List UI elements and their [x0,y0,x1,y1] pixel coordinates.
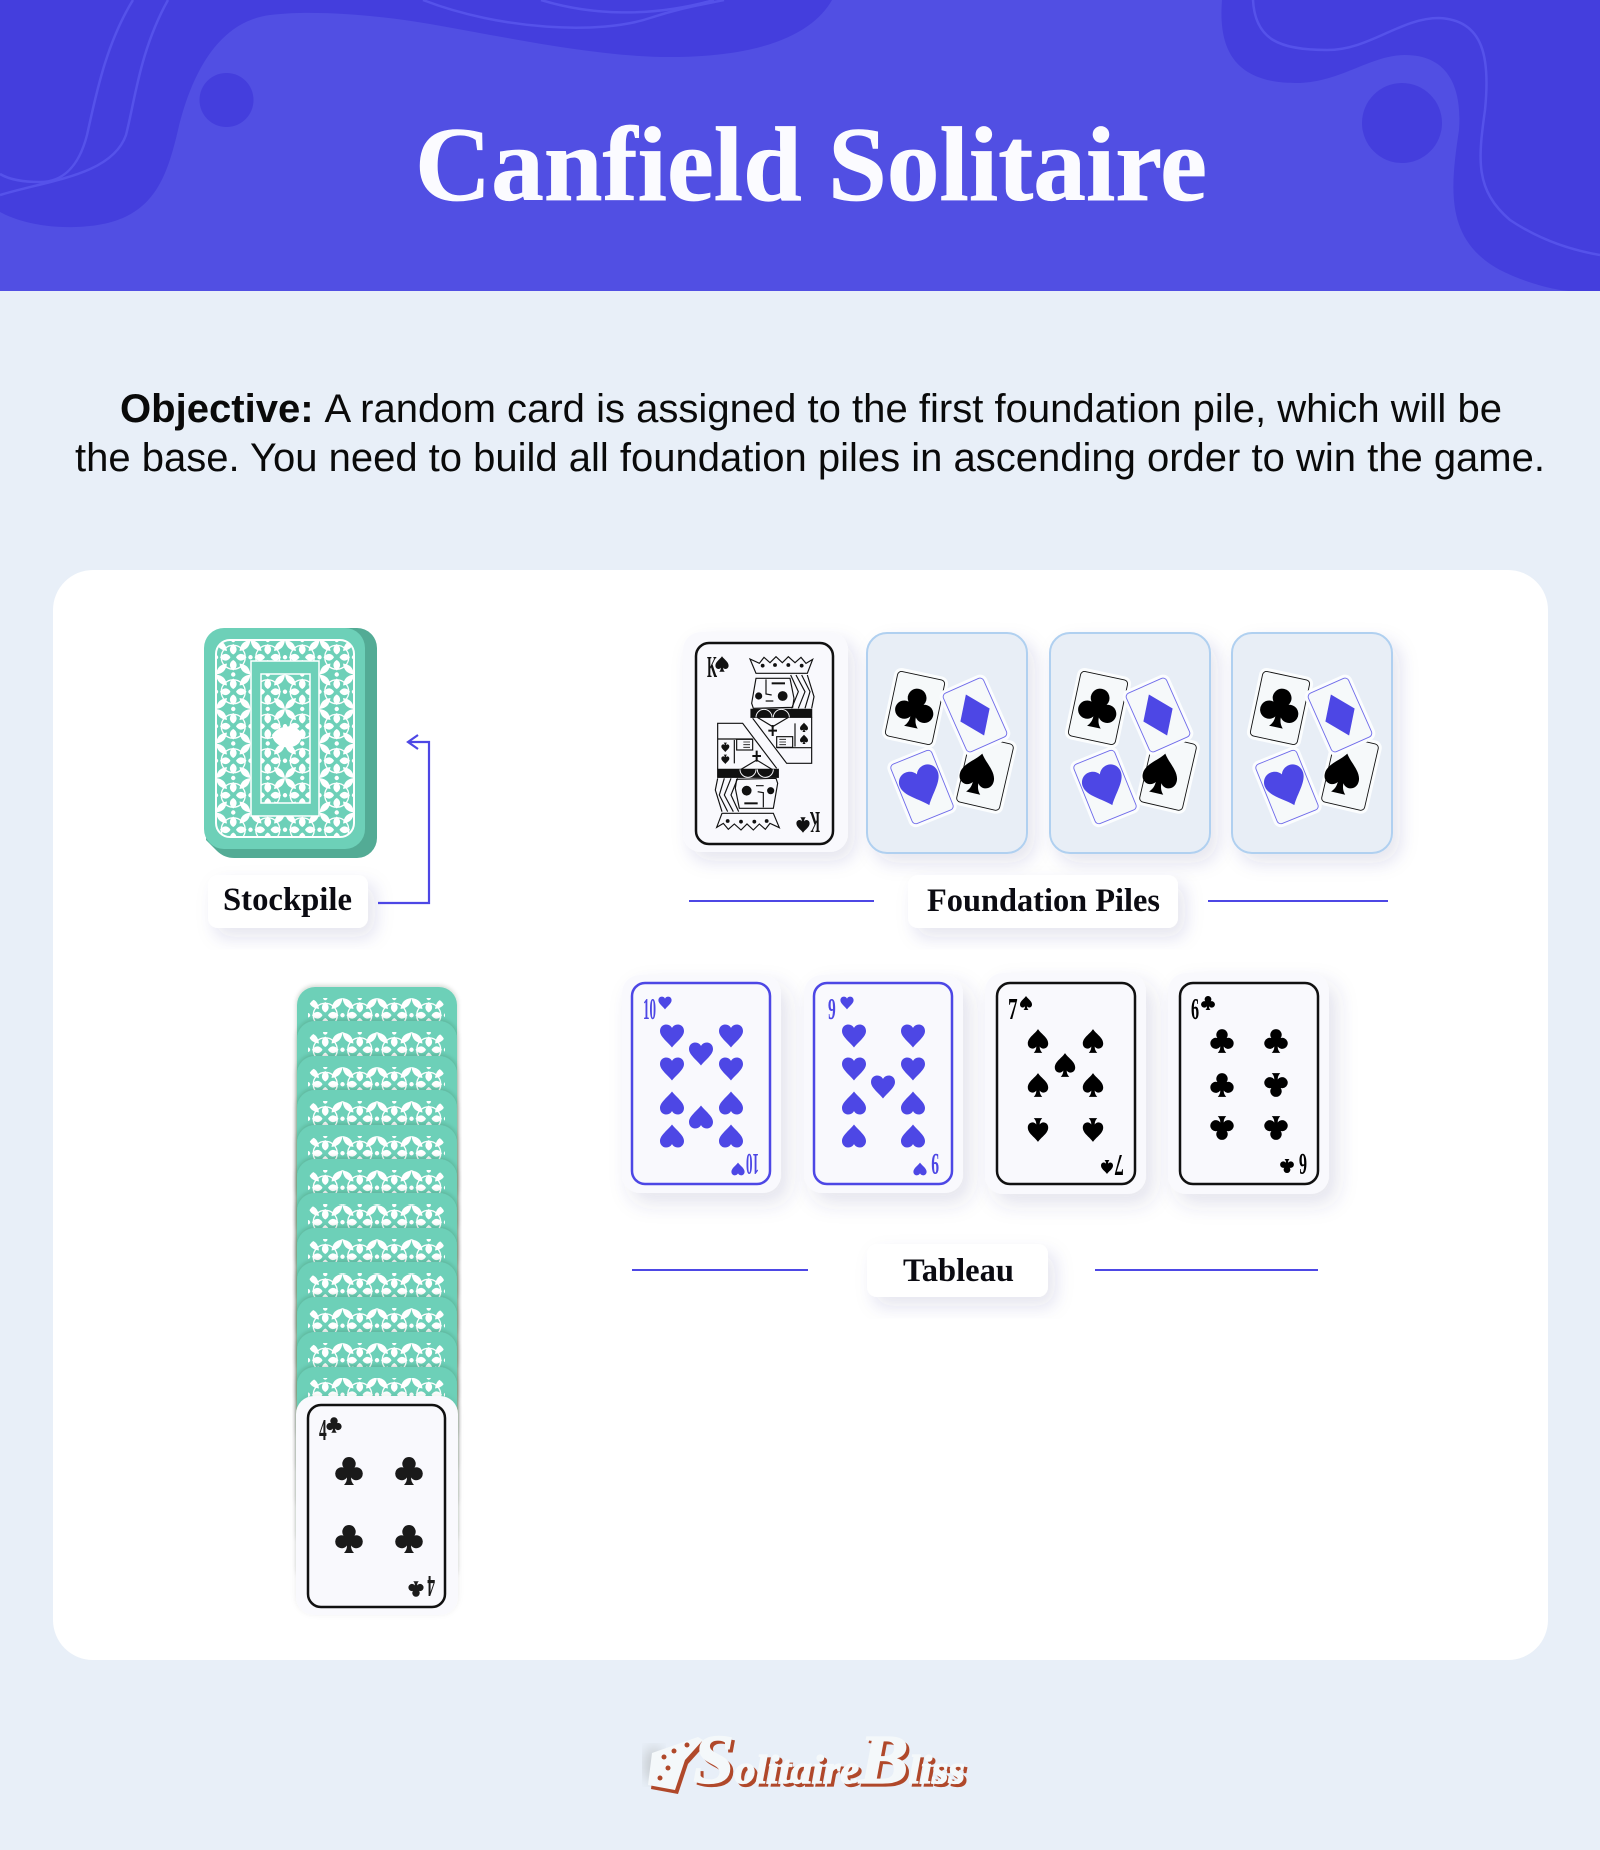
card: ten of hearts: 10 [746,1146,759,1180]
panel: empty foundation pile 1 [867,633,1027,853]
objective text: Objective: A random card is assigned to the first foundation pile, which will be [120,387,1502,431]
card: four of clubs [296,1396,458,1615]
label: Tableau [867,1244,1048,1297]
card: seven of spades: 7 [1008,991,1018,1026]
card: nine of hearts [804,975,963,1193]
card: six of clubs: 6 [1191,993,1199,1027]
card: king of spades: K [810,804,820,838]
label: Tableau: Tableau [903,1253,1014,1289]
card: ten of hearts: 10 [643,993,656,1027]
card: four of clubs: 4 [427,1568,435,1603]
objective text [75,387,1545,480]
logo: Solitaire Bliss: SolitaireBliss [693,1722,965,1799]
label: Foundation Piles: Foundation Piles [927,883,1160,919]
card: king of spades: K [707,651,717,685]
icon: stockpile deck [204,628,377,858]
label: Stockpile [208,875,368,928]
card: nine of hearts: 9 [828,992,836,1027]
header banner [0,0,1600,291]
card: six of clubs: 6 [1299,1146,1307,1180]
label: Stockpile: Stockpile [223,882,352,918]
panel: empty foundation pile 3 [1232,633,1392,853]
card: seven of spades [985,973,1146,1194]
card: six of clubs [1168,973,1329,1194]
card: ten of hearts [622,975,781,1193]
card: seven of spades: 7 [1114,1148,1124,1183]
title: Canfield Solitaire [415,106,1207,223]
objective text: the base. You need to build all foundation piles in ascending order to win the game. [75,436,1545,480]
panel: empty foundation pile 2 [1050,633,1210,853]
card: four of clubs: 4 [319,1413,327,1448]
label: Foundation Piles [908,875,1178,928]
panel: game board [53,570,1548,1660]
card: nine of hearts: 9 [931,1146,939,1181]
card: king of spades [683,632,848,852]
arrow: stock return [378,735,429,903]
reserve stack of face-down cards [297,987,457,1586]
